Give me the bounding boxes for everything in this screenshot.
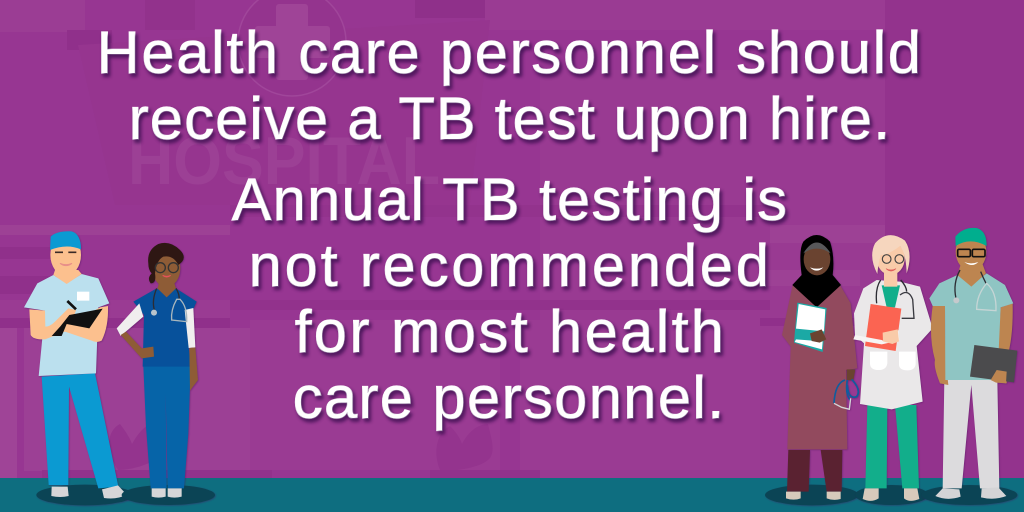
text block: annual testing statement: care personnel. [293,365,724,431]
text block: annual testing statement: Annual TB testing is [232,167,787,233]
floor [0,478,1024,512]
figure: nurse in navy scrubs [117,243,215,505]
figure: male nurse with clipboard [24,231,134,505]
figure: woman in hijab with clipboard [765,235,858,505]
text block: annual testing statement [232,167,787,431]
figure: surgeon in teal scrubs [921,228,1017,505]
text block: annual testing statement: not recommended [249,233,769,299]
text block: annual testing statement: for most health [295,299,724,365]
title: hire testing recommendation: receive a TB test upon hire. [129,86,890,152]
figure: doctor in white coat [853,235,933,505]
figures: right group [765,228,1017,505]
background: hospital facade: HOSPITAL [128,123,440,199]
figures: left group [24,231,215,505]
title: hire testing recommendation [97,20,921,152]
title: hire testing recommendation: Health care personnel should [97,20,921,86]
